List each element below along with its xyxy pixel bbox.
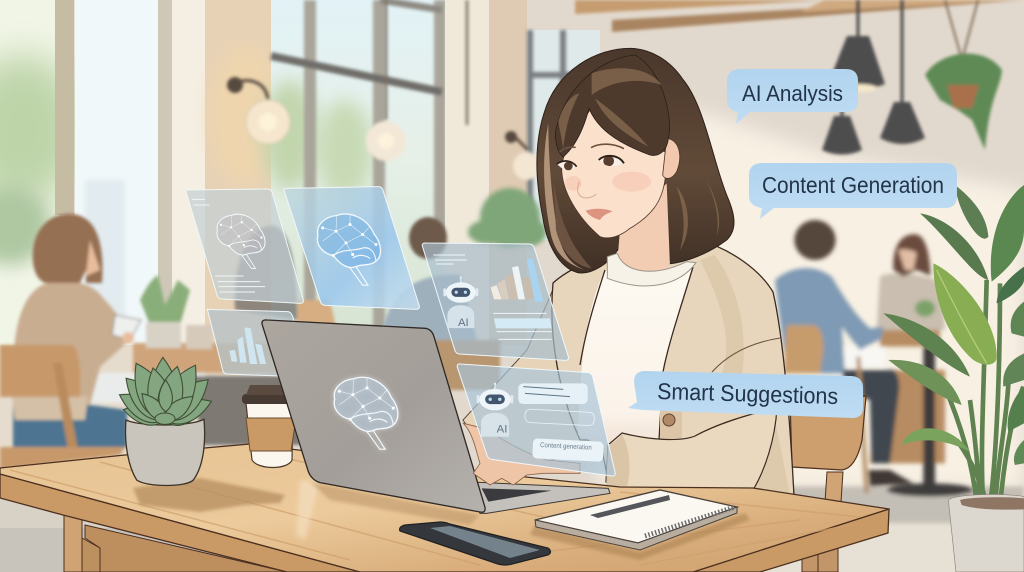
floor shading — [767, 487, 1024, 523]
speech bubble: Content Generation — [749, 163, 957, 219]
sweater — [578, 267, 693, 448]
text lines — [433, 255, 552, 339]
robot — [443, 276, 478, 329]
back floor area — [0, 345, 445, 480]
nose — [578, 182, 596, 198]
mouth — [586, 209, 613, 220]
eye left — [557, 161, 577, 170]
panel: floating bar chart card — [207, 309, 297, 377]
panel: floating brain card centre — [284, 187, 419, 309]
ear — [663, 138, 680, 178]
robot — [477, 383, 513, 437]
back table, plant and chair on the left — [85, 275, 300, 445]
left chair — [0, 345, 80, 397]
ceiling beams — [575, 0, 1024, 32]
chat bubbles — [518, 383, 588, 404]
smartphone — [400, 522, 550, 565]
neck — [617, 183, 670, 274]
face — [562, 110, 668, 238]
left hair edge — [544, 123, 585, 270]
left lower hair — [553, 180, 592, 268]
sleeve seam — [712, 338, 780, 372]
blush — [565, 172, 651, 192]
wood grain — [10, 450, 860, 565]
blurred people behind the panels — [235, 217, 500, 390]
table highlights — [296, 480, 320, 540]
speech bubble: AI Analysis: AI Analysis — [742, 81, 843, 106]
floor under the table — [0, 495, 300, 572]
speech bubble: Smart Suggestions: Smart Suggestions — [657, 378, 839, 409]
speech bubble: AI Analysis — [727, 69, 858, 124]
pen — [590, 495, 670, 518]
base — [463, 482, 610, 513]
eyebrows — [560, 144, 623, 152]
wall lamps — [227, 0, 541, 180]
leaves — [114, 357, 217, 430]
woman: head and hair — [537, 48, 734, 286]
hair highlights — [558, 68, 719, 250]
laptop — [262, 320, 610, 513]
speech bubble: Smart Suggestions — [628, 371, 863, 418]
hands on keyboard — [463, 423, 580, 485]
eye right — [599, 156, 624, 166]
panel: floating robot analytics card — [422, 243, 569, 360]
speech bubble: Content Generation: Content Generation — [762, 172, 944, 198]
table top — [0, 444, 889, 572]
robot: AI — [497, 424, 507, 436]
sleeve — [606, 408, 777, 490]
blurred woman at left table — [0, 214, 141, 470]
stems — [943, 280, 1023, 507]
brain icon — [217, 214, 265, 268]
cardigan shading — [700, 255, 790, 495]
succulent plant — [114, 357, 217, 485]
lid — [262, 320, 485, 512]
woman: torso — [463, 240, 794, 496]
right wall with diagonal light — [445, 0, 1024, 490]
pot — [948, 494, 1024, 572]
sweater collar — [607, 253, 696, 286]
cardigan — [552, 240, 794, 496]
content generation chip: Content generation — [540, 442, 592, 452]
panel: floating chat card — [457, 364, 615, 476]
table legs — [64, 515, 838, 572]
content generation chip — [532, 438, 604, 462]
large potted plant at right — [883, 185, 1024, 572]
hair back — [537, 48, 734, 273]
pendant lamps — [822, 0, 925, 154]
hanging plant — [925, 0, 1002, 150]
panel: floating brain card left — [186, 189, 303, 303]
brain icon — [317, 214, 381, 285]
table shadows — [133, 478, 750, 560]
background plant by window — [468, 188, 546, 248]
robot: AI — [458, 317, 469, 329]
brain logo — [334, 377, 398, 449]
table apron — [85, 525, 287, 572]
centre window — [262, 0, 600, 345]
button placket — [660, 410, 682, 440]
blurred couple at right table — [767, 220, 1024, 572]
cardigan edges — [580, 267, 693, 440]
leaves — [883, 185, 1024, 465]
cuff — [606, 434, 629, 490]
pot — [126, 419, 205, 485]
keyboard — [482, 488, 552, 502]
notebook and pen — [535, 490, 737, 550]
coffee cup — [242, 385, 296, 468]
table edge — [0, 474, 889, 572]
bar chart — [229, 327, 266, 364]
text lines — [192, 199, 265, 292]
left windows — [0, 0, 281, 345]
foreground table — [0, 444, 889, 572]
bar chart — [491, 258, 543, 302]
bangs — [555, 55, 670, 157]
chair behind the woman — [790, 396, 866, 502]
far arm — [463, 280, 600, 465]
